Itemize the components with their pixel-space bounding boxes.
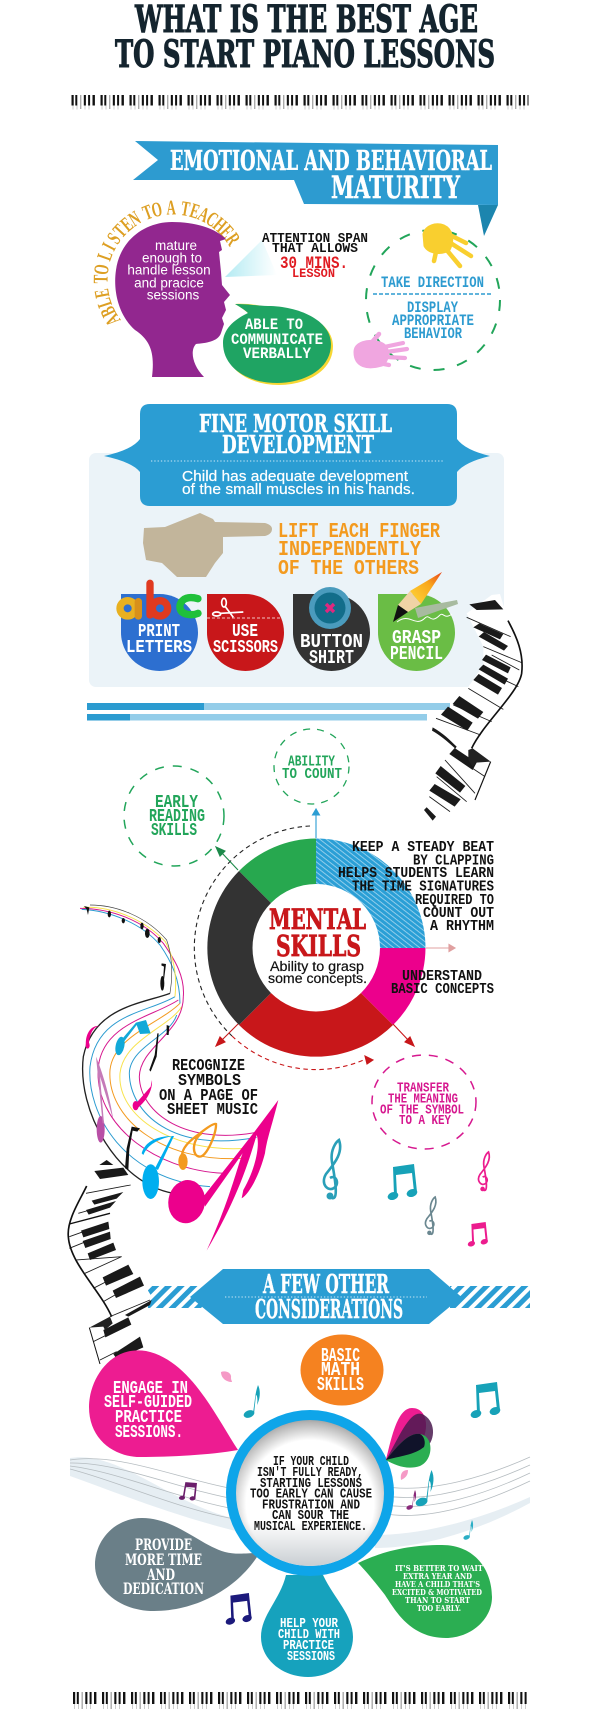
- petal: engage in self-guided practice: ENGAGE IN: [113, 1378, 188, 1399]
- petal: provide more time: [95, 1518, 257, 1611]
- lift each finger text: [278, 521, 440, 581]
- recognize symbols text: RECOGNIZE: [172, 1057, 245, 1076]
- curved heading: able to listen to a teacher: L: [92, 247, 117, 264]
- icon: scissors: [213, 598, 243, 617]
- petal: engage in self-guided practice: SESSIONS.: [115, 1422, 183, 1443]
- behaviour text: TAKE DIRECTION: [381, 274, 484, 292]
- center circle callout: ISN'T FULLY READY,: [257, 1466, 363, 1481]
- curved heading: able to listen to a teacher: E: [116, 212, 138, 236]
- attention span text: ATTENTION SPAN: [262, 232, 368, 247]
- banner: fine motor: of the small muscles in his hands.: [182, 482, 415, 498]
- curved heading: able to listen to a teacher: N: [124, 206, 145, 231]
- petal: basic math skills: MATH: [321, 1359, 360, 1381]
- curved heading: able to listen to a teacher: R: [220, 228, 246, 250]
- petal: provide more time: DEDICATION: [123, 1579, 204, 1598]
- curved heading: able to listen to a teacher: S: [102, 228, 125, 248]
- arrow red left: [216, 1024, 238, 1046]
- head text: mature: [155, 238, 197, 253]
- petal: engage in self-guided practice: SELF-GUIDED: [104, 1392, 192, 1413]
- stripes left: [148, 1286, 202, 1308]
- head text: enough to: [142, 250, 202, 266]
- petal: engage in self-guided practice: PRACTICE: [115, 1407, 182, 1428]
- panel: emotional and behavioral maturity: [88, 141, 500, 385]
- banner ribbon: MATURITY: [331, 170, 461, 206]
- keep a steady beat text: BY CLAPPING: [413, 852, 494, 870]
- icon: beamed note teal large: [470, 1382, 501, 1419]
- icon: single note teal: [243, 1385, 260, 1419]
- piano key divider top: [72, 95, 528, 111]
- icon: pink drop small: [221, 1371, 232, 1382]
- petal: better to wait: EXTRA YEAR AND: [403, 1572, 472, 1582]
- curved heading: able to listen to a teacher: T: [179, 196, 192, 221]
- curved heading: able to listen to a teacher: C: [202, 206, 223, 232]
- speech bubble: communicate: [223, 304, 333, 385]
- petal: better to wait: THAN TO START: [405, 1596, 470, 1606]
- curved heading: able to listen to a teacher: T: [88, 274, 112, 284]
- overlapping petals icon: [386, 1408, 433, 1468]
- mental skills subtitle: some concepts.: [268, 971, 367, 986]
- understand basic concepts text: UNDERSTAND: [402, 968, 482, 985]
- icon: pink drop small 2: [401, 1470, 408, 1480]
- petal: better to wait: [358, 1545, 492, 1638]
- circle: early reading skills: [124, 766, 224, 866]
- icon: beamed note pink: [467, 1222, 489, 1247]
- arrow red right: [393, 1024, 414, 1046]
- head text: sessions: [147, 288, 200, 302]
- petal: basic math skills: SKILLS: [317, 1374, 364, 1396]
- circle: ability to count: TO COUNT: [282, 766, 342, 783]
- attention span text: [262, 232, 368, 281]
- petal: help your child: HELP YOUR: [280, 1616, 338, 1632]
- circle: transfer the meaning: TRANSFER: [397, 1080, 449, 1096]
- dashed circle: behaviour: [366, 230, 500, 370]
- badge: button shirt: BUTTON: [300, 631, 363, 653]
- petal: better to wait: EXCITED & MOTIVATED: [392, 1588, 482, 1598]
- curved heading: able to listen to a teacher: A: [195, 201, 214, 227]
- stripes right: [450, 1286, 530, 1308]
- petal: provide more time: AND: [146, 1565, 175, 1584]
- mental skills heading: MENTAL: [269, 903, 366, 936]
- circle: early reading skills: EARLY: [155, 793, 198, 813]
- curved heading: able to listen to a teacher: A: [100, 309, 125, 331]
- attention span text: 30 MINS.: [280, 254, 348, 274]
- icon: abc letters: [120, 583, 198, 616]
- panel: mental skills: [80, 729, 494, 1251]
- curved heading: able to listen to a teacher: E: [187, 198, 203, 223]
- piano key divider bottom: [73, 1692, 529, 1711]
- circle: transfer the meaning: OF THE SYMBOL: [380, 1102, 464, 1118]
- icon: beamed note teal: [387, 1164, 418, 1201]
- petal: provide more time: MORE TIME: [125, 1550, 202, 1569]
- mental skills heading: [269, 903, 366, 963]
- curved heading: able to listen to a teacher: E: [215, 220, 239, 243]
- music swirl: [80, 905, 278, 1251]
- curved heading: able to listen to a teacher: I: [97, 239, 120, 254]
- attention span text: THAT ALLOWS: [272, 242, 358, 257]
- curved heading: able to listen to a teacher: T: [139, 199, 156, 225]
- center circle callout: FRUSTRATION AND: [262, 1498, 360, 1514]
- curved heading: able to listen to a teacher: B: [95, 302, 120, 321]
- understand basic concepts text: [391, 968, 494, 998]
- banner: fine motor: FINE MOTOR SKILL: [199, 409, 392, 438]
- icon: pink hand: [354, 334, 407, 368]
- recognize symbols text: [159, 1057, 258, 1120]
- petal: help your child: SESSIONS: [287, 1649, 335, 1665]
- arrow green: [216, 847, 238, 870]
- icon: pointing hand: [143, 513, 272, 577]
- arrow up blue: [312, 809, 320, 838]
- lift each finger text: OF THE OTHERS: [278, 558, 419, 581]
- petal: basic math skills: [300, 1334, 384, 1406]
- curved heading: able to listen to a teacher: O: [149, 196, 164, 222]
- curved heading: able to listen to a teacher: E: [89, 287, 114, 300]
- curved heading: able to listen to a teacher: [88, 195, 246, 331]
- keep a steady beat text: COUNT OUT: [423, 905, 494, 922]
- head text: handle lesson: [127, 262, 211, 278]
- center circle callout: STARTING LESSONS: [260, 1477, 362, 1492]
- arrow pink: [426, 944, 455, 952]
- piano ribbon top right: [424, 594, 522, 822]
- keep a steady beat text: HELPS STUDENTS LEARN: [338, 865, 494, 882]
- icon: button: [309, 587, 351, 629]
- petal: provide more time: PROVIDE: [135, 1535, 192, 1554]
- behaviour text: [373, 274, 493, 343]
- badge: button shirt: [293, 587, 370, 671]
- badge: use scissors: [207, 594, 284, 671]
- petal: better to wait: TOO EARLY.: [417, 1604, 461, 1614]
- progress bars divider: [87, 703, 450, 720]
- behaviour text: APPROPRIATE: [392, 312, 474, 330]
- icon: plum note right: [406, 1490, 416, 1511]
- title: [115, 0, 495, 76]
- badge: print letters: LETTERS: [126, 637, 192, 658]
- circle: transfer the meaning: [372, 1055, 476, 1149]
- understand basic concepts text: BASIC CONCEPTS: [391, 981, 494, 998]
- circle: transfer the meaning: THE MEANING: [388, 1092, 458, 1108]
- petal: help your child: PRACTICE: [283, 1638, 334, 1654]
- section: a few other considerations: [68, 1160, 530, 1677]
- keep a steady beat text: REQUIRED TO: [415, 892, 494, 909]
- banner ribbon: [133, 141, 498, 236]
- circle: ability to count: ABILITY: [288, 754, 335, 770]
- recognize symbols text: SYMBOLS: [178, 1072, 241, 1091]
- banner: a few other considerations: A FEW OTHER: [262, 1270, 389, 1300]
- banner: a few other considerations: CONSIDERATIONS: [255, 1295, 403, 1325]
- circle: transfer the meaning: TO A KEY: [399, 1113, 451, 1129]
- mental skills heading: SKILLS: [276, 929, 361, 963]
- icon: teal note right: [415, 1470, 433, 1508]
- banner: fine motor: [104, 404, 490, 506]
- keep a steady beat text: THE TIME SIGNATURES: [352, 878, 494, 896]
- keep a steady beat text: A RHYTHM: [430, 918, 494, 935]
- badge: grasp pencil: PENCIL: [390, 643, 443, 665]
- petal: better to wait: HAVE A CHILD THAT'S: [395, 1580, 480, 1590]
- icon: yellow hand: [423, 224, 471, 266]
- mental skills subtitle: Ability to grasp: [270, 959, 364, 974]
- curved heading: able to listen to a teacher: H: [209, 212, 232, 237]
- mental skills subtitle: [268, 959, 367, 986]
- speech bubble: communicate: VERBALLY: [243, 345, 311, 363]
- circle: early reading skills: READING: [149, 807, 205, 827]
- lift each finger text: LIFT EACH FINGER: [278, 521, 440, 544]
- behaviour text: BEHAVIOR: [404, 325, 462, 343]
- petal: help your child: CHILD WITH: [278, 1627, 340, 1643]
- curved heading: able to listen to a teacher: O: [88, 263, 114, 276]
- panel background: [89, 453, 504, 687]
- center circle callout: [226, 1410, 394, 1576]
- curved heading: able to listen to a teacher: T: [108, 219, 132, 242]
- speech bubble: communicate: ABLE TO: [245, 316, 303, 334]
- badge: grasp pencil: [378, 572, 458, 671]
- petal: engage in self-guided practice: [89, 1350, 238, 1457]
- circle: early reading skills: SKILLS: [151, 821, 197, 841]
- center circle callout: IF YOUR CHILD: [273, 1455, 349, 1470]
- petal: basic math skills: BASIC: [321, 1345, 360, 1367]
- attention span text: LESSON: [292, 267, 335, 281]
- center circle callout: MUSICAL EXPERIENCE.: [254, 1520, 367, 1535]
- badge: button shirt: SHIRT: [309, 647, 354, 669]
- recognize symbols text: SHEET MUSIC: [167, 1101, 258, 1120]
- icon: treble clef teal: [324, 1140, 340, 1199]
- banner: fine motor: Child has adequate development: [182, 469, 408, 485]
- donut chart: [207, 838, 426, 1057]
- icon: head silhouette: [115, 222, 230, 377]
- dashed arc black: [194, 826, 310, 1036]
- piano ribbon left: [68, 1160, 152, 1367]
- badge: grasp pencil: GRASP: [392, 627, 441, 649]
- badge: print letters: [120, 583, 198, 671]
- keep a steady beat text: KEEP A STEADY BEAT: [352, 839, 494, 856]
- behaviour text: DISPLAY: [407, 299, 458, 317]
- icon: plum beamed note left: [178, 1480, 199, 1504]
- head text: [127, 238, 211, 302]
- curved heading: able to listen to a teacher: A: [166, 195, 176, 219]
- banner: a few other considerations: [190, 1269, 462, 1325]
- lift each finger text: INDEPENDENTLY: [278, 539, 421, 562]
- recognize symbols text: ON A PAGE OF: [159, 1087, 258, 1106]
- center circle callout: CAN SOUR THE: [272, 1509, 349, 1524]
- panel: fine motor skill development: [89, 404, 504, 687]
- icon: treble clef gray: [425, 1197, 436, 1235]
- curved heading: able to listen to a teacher: L: [91, 295, 117, 311]
- petal: better to wait: IT'S BETTER TO WAIT: [395, 1564, 483, 1574]
- icon: pencil: [393, 572, 458, 622]
- banner ribbon: EMOTIONAL AND BEHAVIORAL: [170, 146, 492, 177]
- speech cone: [225, 240, 277, 277]
- badge: use scissors: SCISSORS: [213, 637, 278, 658]
- speech bubble: communicate: COMMUNICATE: [231, 331, 323, 349]
- keep a steady beat text: [338, 839, 494, 935]
- icon: small teal note: [463, 1520, 473, 1541]
- icon: treble clef pink: [479, 1152, 489, 1191]
- dashed arc red arrow: [232, 1036, 373, 1070]
- badge: print letters: PRINT: [138, 621, 180, 642]
- banner: fine motor: DEVELOPMENT: [222, 430, 374, 459]
- center circle callout: TOO EARLY CAN CAUSE: [250, 1488, 372, 1502]
- head text: and pracice: [134, 276, 204, 290]
- badge: use scissors: USE: [232, 621, 258, 642]
- staff wave background: [70, 1457, 530, 1548]
- icon: navy beamed note: [225, 1593, 253, 1626]
- petal: help your child: [261, 1575, 353, 1677]
- circle: ability to count: [274, 729, 349, 804]
